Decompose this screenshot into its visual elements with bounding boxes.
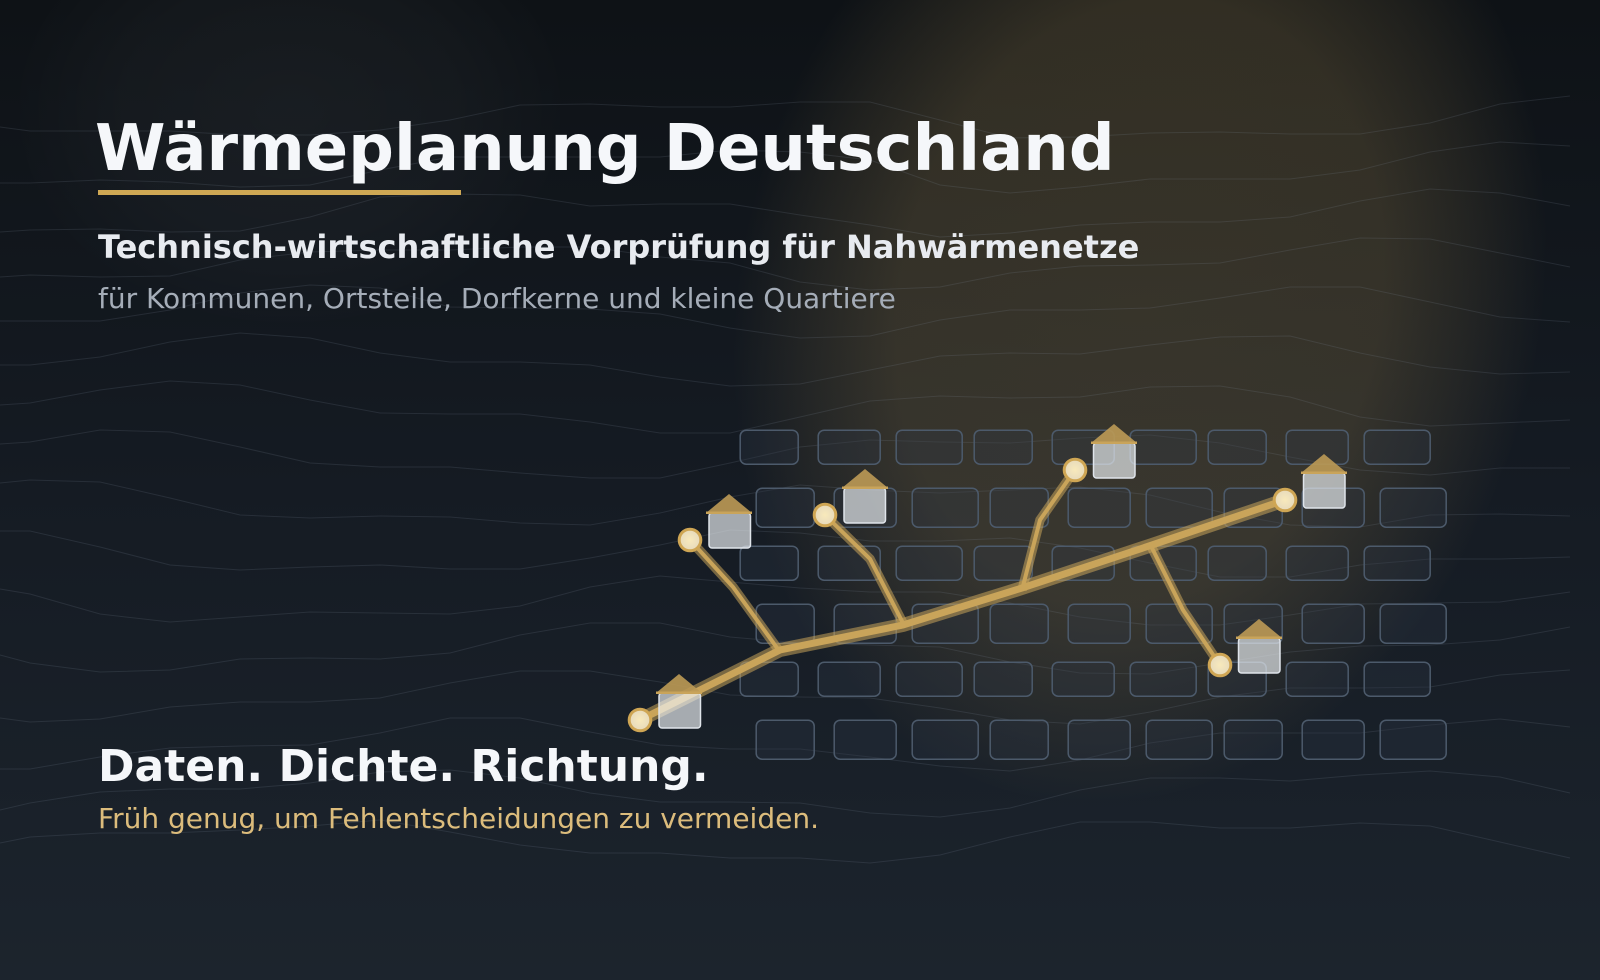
title underline xyxy=(98,190,461,195)
tagline note: Früh genug, um Fehlentscheidungen zu vermeiden. xyxy=(98,802,819,835)
house 5 xyxy=(1301,454,1347,508)
main pipe xyxy=(640,500,1285,720)
branch pipe 2 xyxy=(825,515,905,627)
house 2 xyxy=(706,494,752,548)
tagline: Daten. Dichte. Richtung. xyxy=(98,741,709,792)
branch pipe 3 xyxy=(1022,470,1075,590)
subtitle: Technisch-wirtschaftliche Vorprüfung für Nahwärmenetze xyxy=(98,228,1139,266)
heat network pipes xyxy=(640,470,1285,720)
audience line: für Kommunen, Ortsteile, Dorfkerne und kleine Quartiere xyxy=(98,282,896,315)
building footprint grid xyxy=(740,430,1446,759)
house 6 xyxy=(1236,619,1282,673)
house 4 xyxy=(1091,424,1137,478)
contour lines xyxy=(0,96,1570,863)
title: Wärmeplanung Deutschland xyxy=(95,112,1115,186)
branch pipe 4 xyxy=(1150,544,1220,665)
house 1 xyxy=(656,674,702,728)
connection nodes xyxy=(629,459,1296,731)
branch pipe 1 xyxy=(690,540,780,652)
house 3 xyxy=(842,469,888,523)
